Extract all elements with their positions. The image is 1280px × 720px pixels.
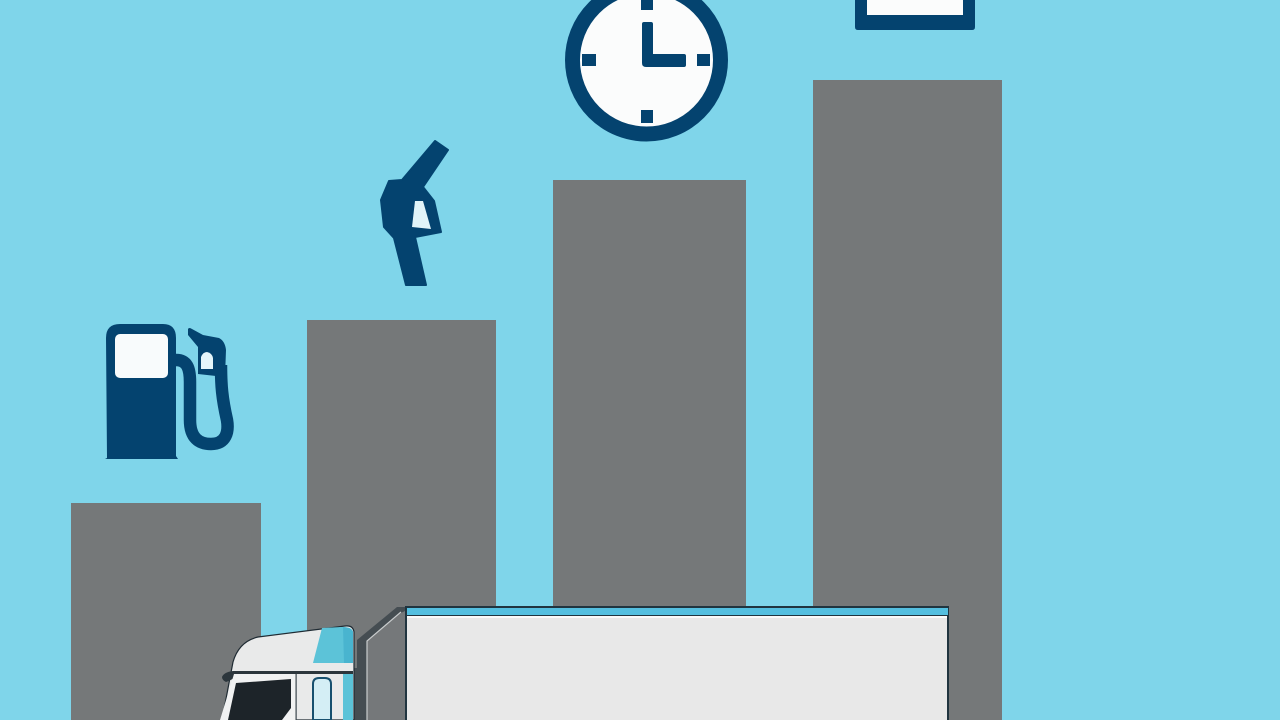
icon: fuel nozzle xyxy=(381,141,448,285)
bar 2 xyxy=(307,320,496,720)
trailer front xyxy=(353,607,406,720)
trailer box xyxy=(405,606,949,720)
icon: document frame xyxy=(855,0,975,30)
truck xyxy=(220,606,949,720)
bar chart xyxy=(71,80,1002,720)
icon: clock xyxy=(572,0,720,134)
icon: fuel pump xyxy=(105,324,228,459)
bar 3 xyxy=(553,180,746,720)
bar 4 xyxy=(813,80,1002,720)
cab xyxy=(220,626,354,720)
bar 1 xyxy=(71,503,261,720)
